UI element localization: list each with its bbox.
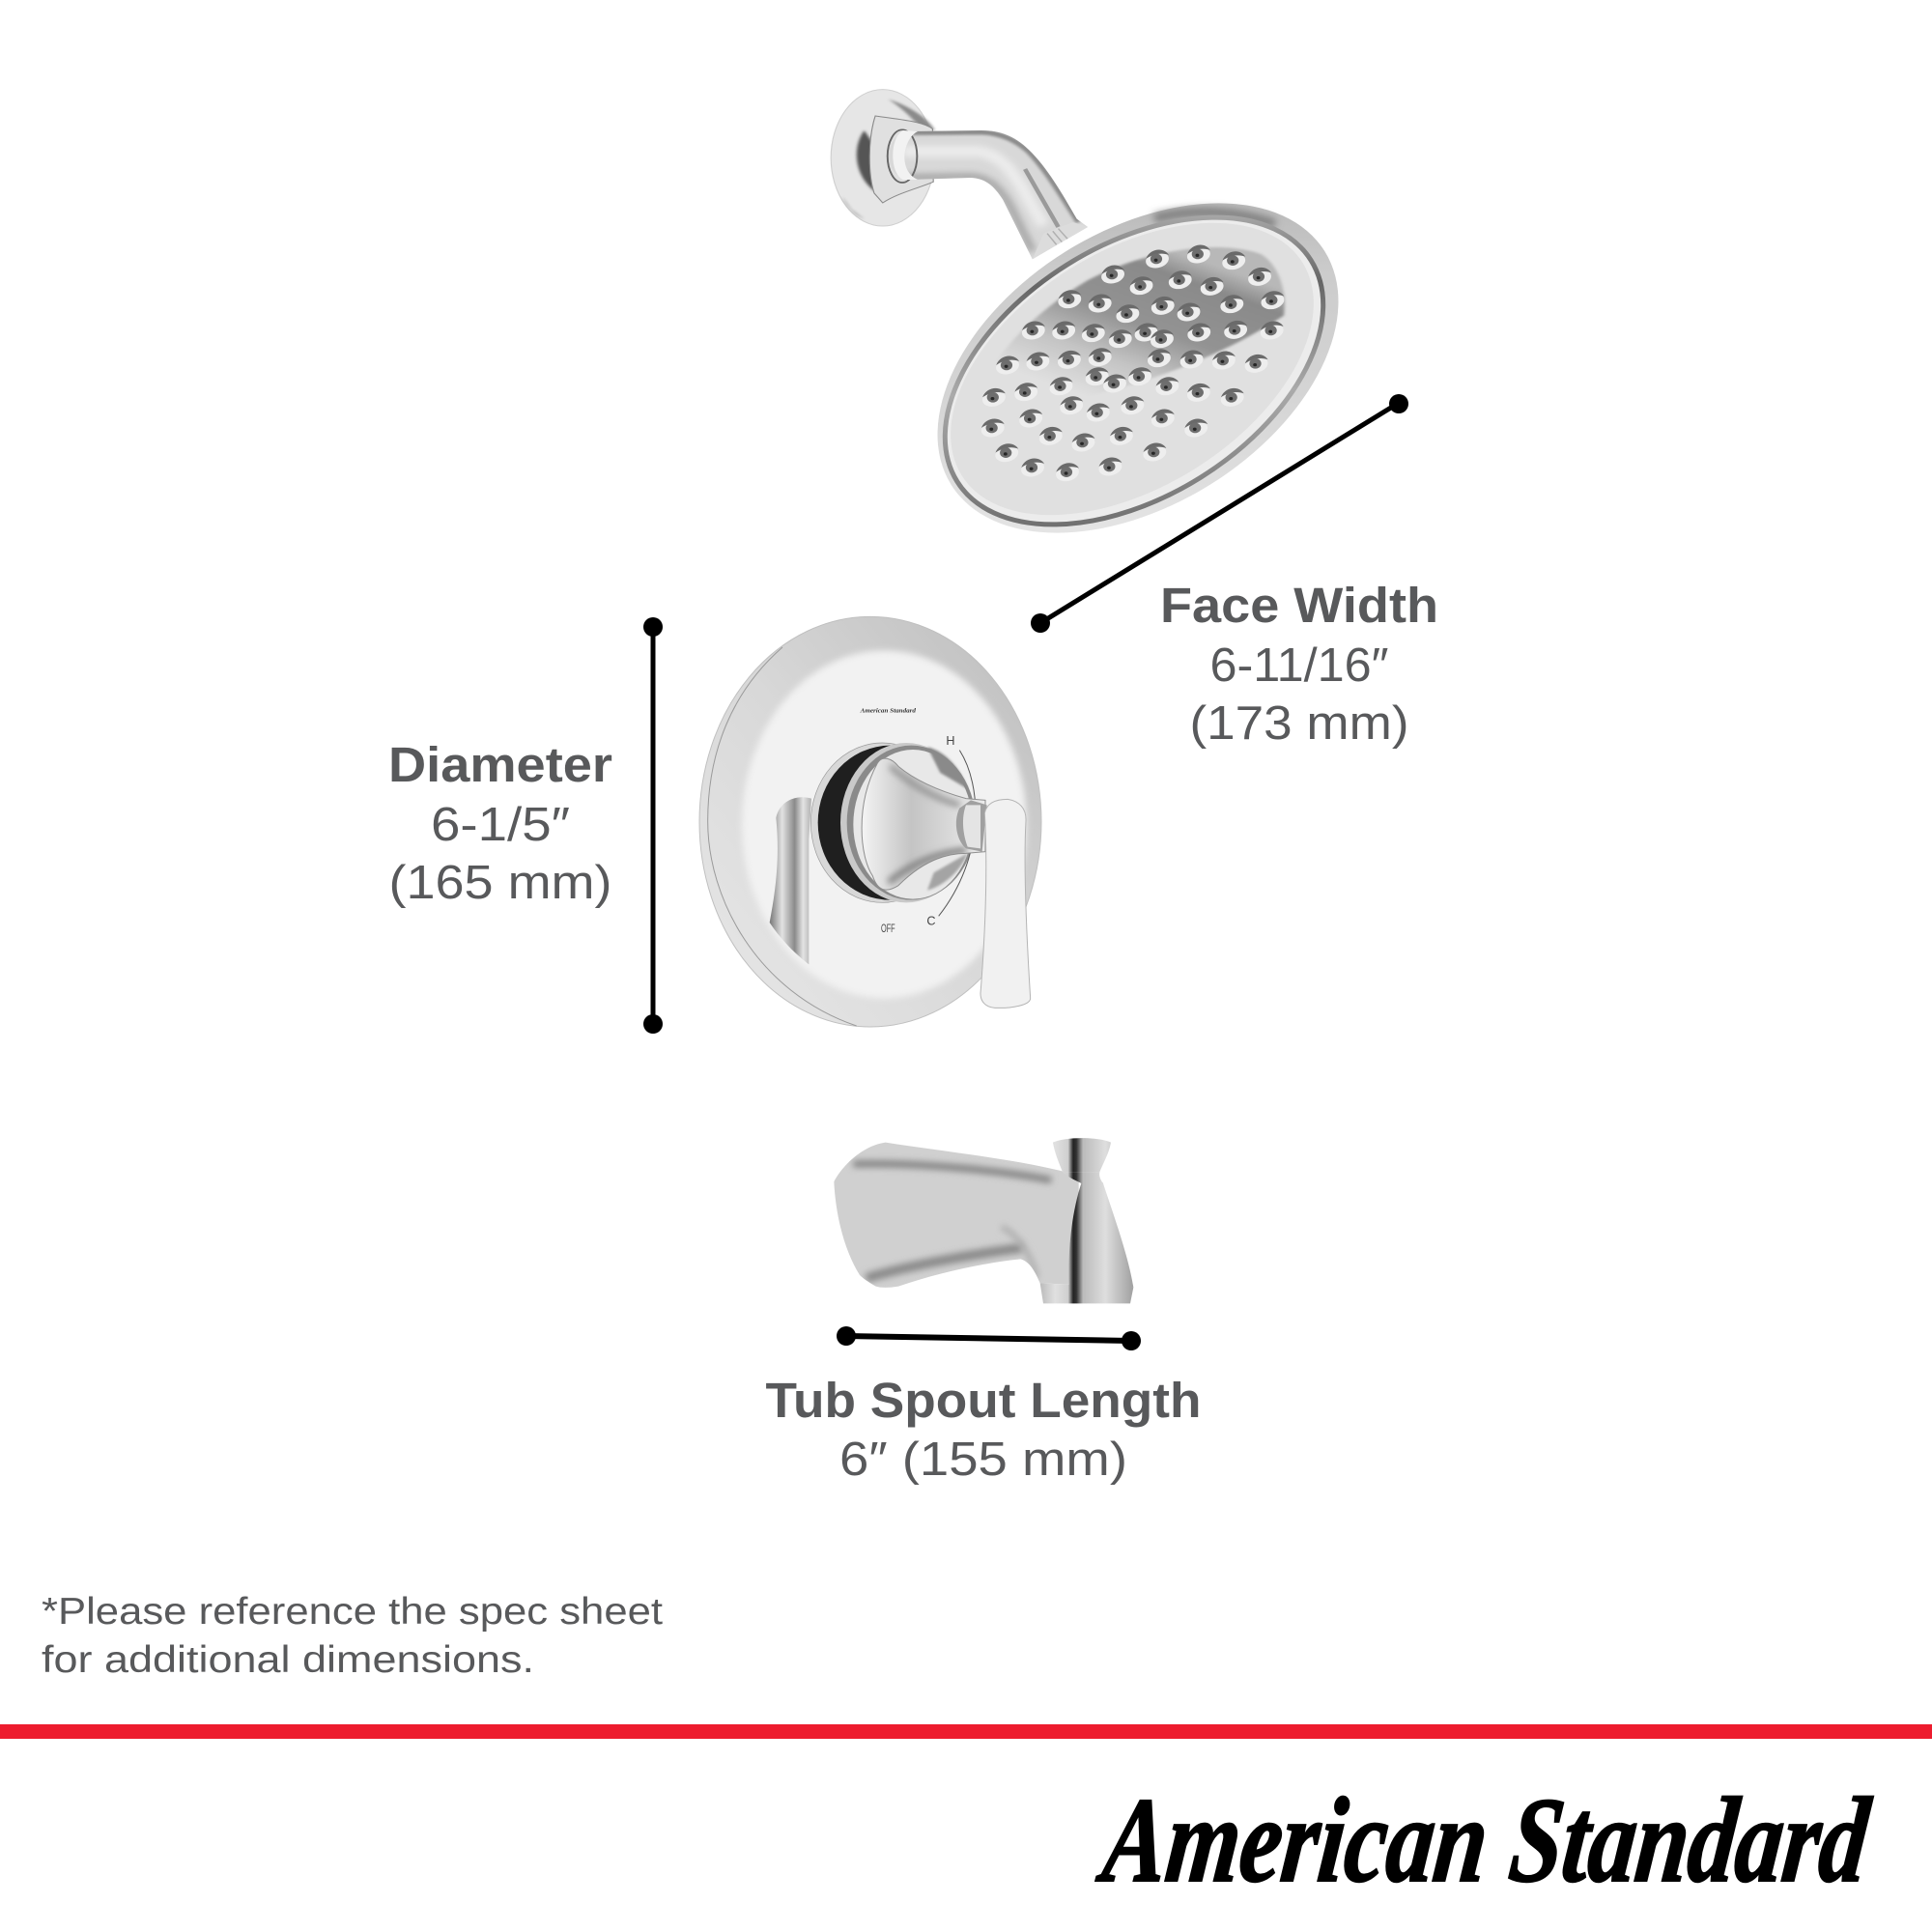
- label: tub spout length: 6″ (155 mm): [839, 1434, 1127, 1486]
- diverter knob: [1053, 1138, 1111, 1172]
- label: diameter: Diameter: [388, 737, 612, 792]
- front lever: [980, 799, 1031, 1008]
- label: tub spout length: Tub Spout Length: [765, 1373, 1202, 1428]
- footnote: for additional dimensions.: [42, 1639, 534, 1681]
- spout body: [834, 1143, 1079, 1288]
- shower head rim: [878, 135, 1398, 601]
- icon: tub spout: [834, 1138, 1133, 1303]
- round plate: [699, 616, 1041, 1027]
- diverter base: [1040, 1283, 1133, 1303]
- icon: shower head with arm: [831, 89, 1339, 533]
- label: face width: [1160, 578, 1438, 750]
- label: diameter: [388, 737, 612, 909]
- shower arm and wall flange: [831, 90, 1088, 259]
- footnote: [42, 1591, 663, 1681]
- shower face with spray nozzles: [979, 244, 1287, 484]
- icon: valve trim plate with lever: [699, 616, 1041, 1027]
- red divider bar: [0, 1724, 1932, 1739]
- icon: valve trim plate with lever: C: [926, 914, 936, 927]
- dimension line: tub spout length: [837, 1326, 1141, 1350]
- footnote: *Please reference the spec sheet: [42, 1591, 663, 1633]
- rear lever: [770, 797, 811, 964]
- icon: valve trim plate with lever: OFF: [881, 922, 895, 935]
- label: face width: (173 mm): [1190, 697, 1408, 750]
- scale letters: H: [946, 734, 955, 748]
- dimension line: face width: [1031, 394, 1408, 633]
- label: tub spout length: [765, 1373, 1202, 1486]
- label: face width: 6-11/16″: [1209, 639, 1389, 692]
- diverter collar: [1063, 1172, 1103, 1183]
- label: face width: Face Width: [1160, 578, 1438, 633]
- diverter cone: [1068, 1182, 1133, 1288]
- knob handle: [862, 758, 985, 890]
- knob base: [810, 743, 953, 902]
- label: diameter: (165 mm): [388, 857, 612, 909]
- temperature scale arc: [939, 751, 976, 916]
- logo on plate: American Standard: [860, 707, 917, 714]
- dimension line: diameter: [643, 617, 663, 1034]
- label: diameter: 6-1/5″: [431, 799, 570, 851]
